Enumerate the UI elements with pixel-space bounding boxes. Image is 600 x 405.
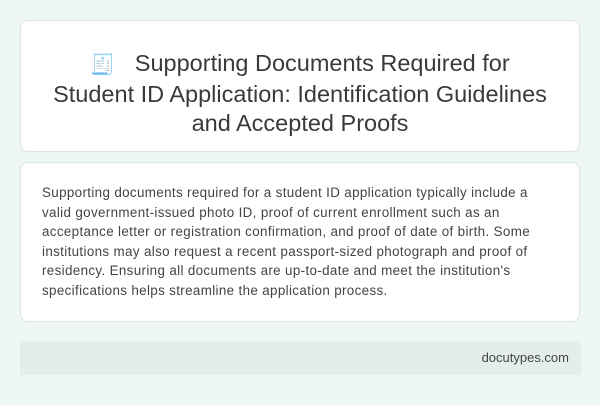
description text: specifications helps streamline the application process. [42, 282, 388, 298]
description text: residency. Ensuring all documents are up-to-date and meet the institution's [42, 263, 510, 278]
description text [42, 185, 530, 298]
description card [20, 162, 580, 322]
title card [20, 20, 580, 152]
title: and Accepted Proofs [192, 110, 408, 136]
description text: valid government-issued photo ID, proof of current enrollment such as an [42, 204, 500, 220]
title: 🧾 Supporting Documents Required for [90, 50, 510, 76]
title: Student ID Application: Identification Guidelines [53, 81, 547, 107]
description text: acceptance letter or registration confirmation, and proof of date of birth. Some [42, 224, 530, 239]
footer [20, 341, 581, 375]
description text: Supporting documents required for a student ID application typically include a [42, 185, 528, 200]
title [53, 50, 547, 136]
footer: docutypes.com [482, 350, 569, 365]
description text: institutions may also request a recent passport-sized photograph and proof of [42, 244, 527, 258]
